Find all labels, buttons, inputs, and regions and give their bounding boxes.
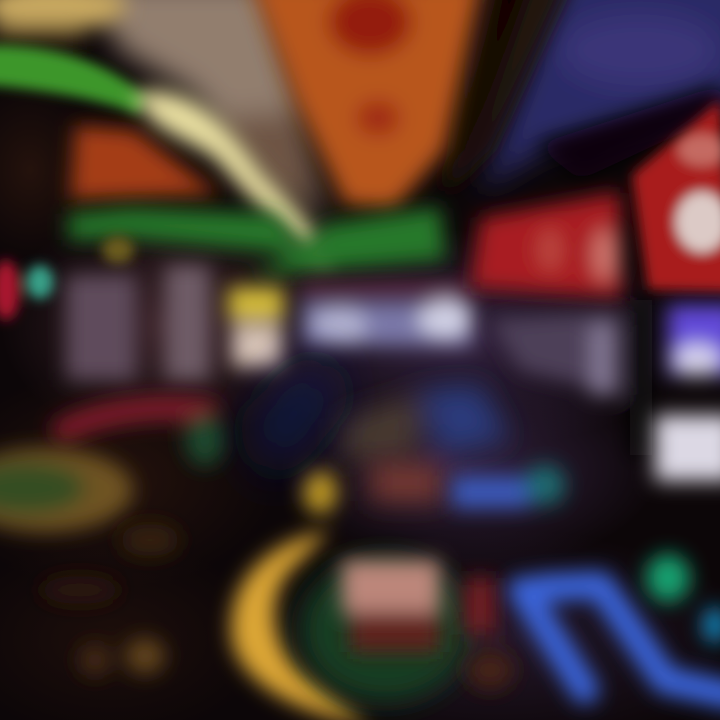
- right slot row: [490, 300, 652, 455]
- yellow and white lit sign: [228, 287, 284, 367]
- orange left ceiling strip: [70, 125, 220, 200]
- bright screens right: [655, 305, 720, 481]
- ceiling: orange central panel: [250, 0, 482, 208]
- green curved band: [0, 45, 150, 114]
- green round carpet: [300, 558, 470, 702]
- left spot lights: [0, 236, 134, 320]
- aisle blue and brown lights: [340, 385, 510, 501]
- pale yellow streak: [135, 91, 330, 268]
- dim brown floor spots: [40, 524, 180, 676]
- blue neon N shape: [522, 585, 720, 695]
- pink white centre machine: [342, 560, 514, 690]
- teal green accent lights: [646, 554, 720, 643]
- large red sign right: [632, 100, 720, 292]
- ceiling: taupe left section: [85, 0, 325, 220]
- green wall band: [68, 207, 446, 276]
- ceiling: dark band: [445, 0, 720, 195]
- red signs row: [470, 192, 622, 298]
- yellow curved floor arc: [231, 530, 370, 720]
- slot machines left: purple grey panels: [66, 265, 210, 380]
- aisle bright lights: [303, 465, 565, 514]
- lavender white lights row: [300, 284, 472, 346]
- top left yellow glow: [0, 0, 127, 47]
- green roulette table: [0, 448, 133, 532]
- red gaming table edge: [50, 397, 225, 466]
- ceiling: navy blue right section: [480, 0, 720, 190]
- blue dark aisle shadow: [250, 355, 340, 480]
